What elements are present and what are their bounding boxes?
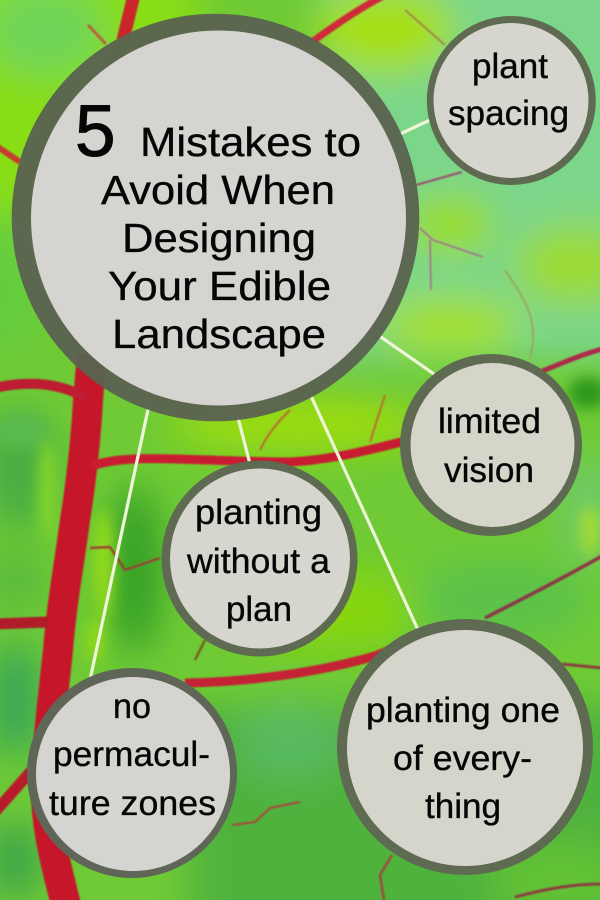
circle: planting one of everything: planting one [366,691,560,730]
circle: planting one of everything: thing [425,787,501,826]
title text: Avoid When [101,167,335,213]
circle: limited vision: vision [444,451,534,490]
title text: Landscape [112,311,326,357]
title text: Mistakes to [140,119,361,165]
circle: planting without a plan: planting [195,493,322,532]
circle: limited vision: limited [438,402,541,441]
circle: plant spacing: plant [472,47,548,86]
circle: no permaculture zones [27,668,237,878]
circle: no permaculture zones: permacul- [53,735,210,774]
connector lines [90,120,434,680]
circle: planting without a plan: plan [226,590,292,629]
title text [75,91,361,357]
circle: planting without a plan [162,460,358,656]
title text: Designing [122,215,316,261]
circle: no permaculture zones: ture zones [49,784,216,823]
circle: planting one of everything: of every- [393,739,532,778]
title text: 5 [75,91,116,172]
circle: planting without a plan: without a [186,542,331,581]
circle: plant spacing: spacing [448,94,569,133]
title text: Your Edible [108,263,331,309]
circle: planting one of everything [337,619,593,875]
circle: plant spacing [427,16,596,185]
thin veins [485,556,600,618]
main title circle [12,14,419,421]
circle: limited vision [400,354,582,536]
circle: no permaculture zones: no [113,687,151,726]
main vein [46,355,92,900]
